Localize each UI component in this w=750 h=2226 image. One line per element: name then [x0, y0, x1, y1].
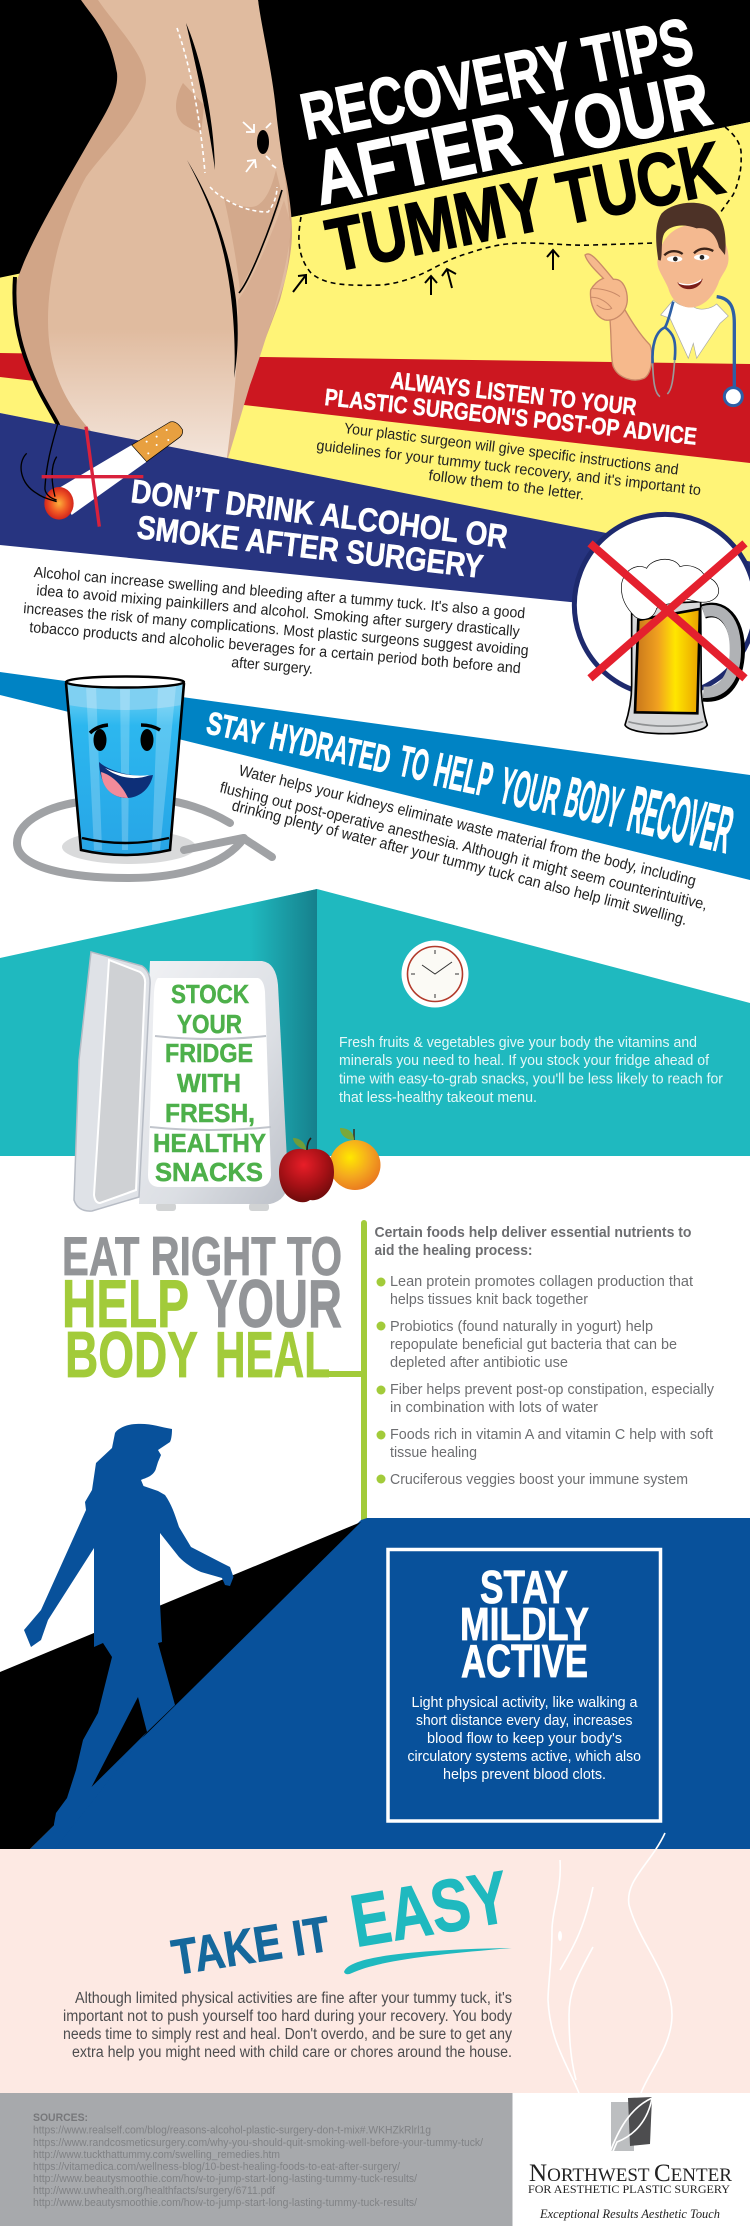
text: nutrients heading: Certain foods help deliver essential nutrients to [374, 1224, 692, 1241]
panel: take it easy background [0, 1849, 750, 2093]
heading: always listen: ALWAYS LISTEN TO YOUR [389, 367, 638, 421]
body outline strokes [14, 23, 282, 478]
text: light activity [408, 1694, 641, 1783]
logo: northwest center [512, 2093, 750, 2226]
blue band [0, 672, 750, 880]
heading: stay hydrated: YOUR [494, 757, 566, 827]
text: light activity: blood flow to keep your body's [427, 1730, 622, 1747]
navel outline [558, 1931, 562, 1941]
decorative body outline [548, 1833, 672, 2093]
heading: eat right: HEAL [215, 1318, 330, 1391]
logo: northwest center: Exceptional Results Aesthetic Touch [539, 2206, 720, 2221]
green divider [325, 1223, 364, 1520]
text: alcohol and smoking: Alcohol can increase swelling and bleeding after a tummy tuck. It's also a good [33, 564, 526, 622]
panel: stay mildly active box: STAY [480, 1561, 568, 1613]
fridge text: YOUR [177, 1011, 242, 1039]
heading: stay hydrated: HELP [430, 744, 497, 808]
panel: sources [0, 2093, 512, 2226]
text: take it easy: Although limited physical activities are fine after your tummy tuck, it's [75, 1990, 512, 2007]
panel: sources: https://vitamedica.com/wellness-blog/10-best-healing-foods-to-eat-after-surgery/ [33, 2161, 401, 2173]
text: take it easy: needs time to simply rest and heal. Don't overdo, and be sure to get any [63, 2026, 512, 2043]
text: fresh fruits: that less-healthy takeout menu. [339, 1089, 537, 1106]
text: water: flushing out post-operative anesthesia. Although it might seem counterintuitive, [218, 779, 709, 914]
doctor collar [661, 300, 728, 358]
text: water: drinking plenty of water after your tummy tuck can also help limit swelling. [230, 797, 689, 929]
panel: blue stay active background [29, 1518, 750, 1850]
text: nutrients heading: aid the healing process: [374, 1242, 532, 1259]
list: nutrient bullets: Fiber helps prevent post-op constipation, especially [390, 1381, 714, 1398]
gap between legs [92, 1697, 147, 1787]
panel: sources: http://www.tuckthattummy.com/swelling_remedies.htm [33, 2149, 280, 2161]
panel: sources: https://www.realself.com/blog/reasons-alcohol-plastic-surgery-don-t-mix#.WKHZkRlrl1g [33, 2124, 431, 2136]
text: take it easy: extra help you might need with child care or chores around the house. [72, 2044, 512, 2061]
list: nutrient bullets: depleted after antibiotic use [390, 1354, 568, 1371]
text: fresh fruits: time with easy-to-grab snacks, you'll be less likely to reach for [339, 1070, 723, 1088]
heading: always listen [323, 367, 698, 451]
text: fresh fruits: minerals you need to heal. If you stock your fridge ahead of [339, 1052, 710, 1069]
icon: cigarette crossed out [21, 422, 183, 527]
doctor eyes and smile [664, 249, 713, 289]
fridge text: FRIDGE [165, 1040, 253, 1068]
dashed incision line [177, 28, 277, 212]
icon: orange [330, 1128, 380, 1190]
list: nutrient bullets: repopulate beneficial gut bacteria that can be [390, 1336, 677, 1353]
heading: don't drink alcohol: SMOKE AFTER SURGERY [135, 508, 485, 585]
text: take it easy: important not to push yourself too hard during your recovery. You body [63, 2008, 512, 2025]
list: nutrient bullets: helps tissues knit back together [390, 1291, 588, 1308]
fridge text [153, 981, 266, 1187]
list: nutrient bullets: tissue healing [390, 1444, 477, 1461]
panel: sources: https://www.randcosmeticsurgery.com/why-you-should-quit-smoking-well-before-your-tummy-tuck/ [33, 2137, 484, 2149]
panel: sources: http://www.beautysmoothie.com/how-to-jump-start-long-lasting-tummy-tuck-results/ [33, 2173, 418, 2185]
fridge text: STOCK [171, 981, 250, 1009]
yellow background panel [0, 122, 750, 565]
icon: open fridge [74, 952, 288, 1211]
list: nutrient bullets: Probiotics (found naturally in yogurt) help [390, 1318, 653, 1335]
doctor face [657, 225, 729, 308]
list: nutrient bullets: Cruciferous veggies boost your immune system [390, 1471, 688, 1488]
icon: beer mug crossed out [574, 514, 750, 734]
heading: take it easy [168, 1855, 514, 1986]
text: light activity: short distance every day, increases [416, 1712, 632, 1729]
heading: stay hydrated: STAY [204, 705, 267, 752]
list: nutrient bullets [376, 1273, 714, 1488]
text: surgeon advice: Your plastic surgeon will give specific instructions and [343, 420, 680, 479]
doctor hair [656, 203, 726, 261]
panel: sources: SOURCES: [33, 2112, 88, 2124]
text: fresh fruits: Fresh fruits & vegetables give your body the vitamins and [339, 1034, 697, 1051]
text: alcohol and smoking: after surgery. [231, 654, 314, 678]
panel: stay mildly active box: ACTIVE [461, 1635, 588, 1687]
text: alcohol and smoking [23, 564, 529, 678]
fridge text: FRESH, [165, 1100, 255, 1128]
black header background [0, 0, 750, 278]
text: fresh fruits [339, 1034, 723, 1106]
illustration: torso [14, 0, 292, 478]
text: nutrients heading [374, 1224, 692, 1259]
heading: eat right: EAT RIGHT TO [62, 1225, 342, 1287]
heading: stay hydrated: HYDRATED [266, 715, 394, 782]
heading: take it easy: TAKE IT [168, 1906, 334, 1986]
icon: water glass with circular arrow [17, 676, 272, 878]
fridge text: WITH [177, 1070, 241, 1098]
black shadow [0, 1522, 361, 1850]
text: light activity: helps prevent blood clots. [443, 1766, 606, 1783]
text: alcohol and smoking: tobacco products and alcoholic beverages for a certain period both before and [29, 619, 521, 677]
logo: northwest center: NORTHWEST CENTER [529, 2160, 732, 2187]
fridge text: HEALTHY [153, 1130, 266, 1158]
text: water: Water helps your kidneys eliminate waste material from the body, including [237, 762, 698, 890]
navel with arrows [243, 122, 276, 172]
red band [0, 353, 750, 463]
text: surgeon advice: guidelines for your tummy tuck recovery, and it's important to [316, 437, 702, 499]
list: nutrient bullets: in combination with lots of water [390, 1399, 598, 1416]
illustration: doctor [585, 203, 742, 406]
logo: northwest center: FOR AESTHETIC PLASTIC SURGERY [528, 2182, 730, 2196]
heading: stay hydrated: TO [395, 737, 433, 791]
heading: stay hydrated [204, 705, 740, 867]
text: light activity: Light physical activity, like walking a [412, 1694, 638, 1711]
list: nutrient bullets: Lean protein promotes collagen production that [390, 1273, 694, 1290]
heading: take it easy: EASY [345, 1855, 514, 1963]
heading: eat right [62, 1225, 342, 1391]
text: surgeon advice: follow them to the letter. [427, 467, 585, 504]
panel: sources: http://www.uwhealth.org/healthfacts/surgery/6711.pdf [33, 2185, 276, 2197]
panel: teal house background [0, 889, 750, 1156]
text: light activity: circulatory systems active, which also [408, 1748, 641, 1765]
icon: apple [279, 1138, 334, 1202]
navy band [0, 413, 750, 620]
text: alcohol and smoking: idea to avoid mixing painkillers and alcohol. Smoking after surgery drastically [36, 582, 521, 640]
silhouette: walking woman [24, 1424, 234, 1850]
doctor arm and hand [585, 254, 652, 380]
heading: eat right: YOUR [206, 1266, 342, 1342]
dashed outline with arrows [293, 127, 741, 295]
fridge text: SNACKS [155, 1159, 263, 1187]
title [294, 3, 730, 288]
stethoscope [652, 297, 742, 406]
icon: wall clock [402, 940, 468, 1008]
heading: stay hydrated: BODY [559, 765, 628, 840]
heading: don't drink alcohol: DON’T DRINK ALCOHOL OR [129, 472, 510, 555]
heading: eat right: BODY [65, 1318, 198, 1391]
panel: sources: http://www.beautysmoothie.com/how-to-jump-start-long-lasting-tummy-tuck-results/ [33, 2197, 418, 2209]
panel: stay mildly active box [388, 1550, 660, 1821]
text: alcohol and smoking: increases the risk of many complications. Most plastic surgeons suggest avoiding [23, 600, 529, 659]
text: take it easy [63, 1990, 512, 2061]
panel: stay mildly active box: MILDLY [460, 1598, 589, 1650]
heading: eat right: HELP [62, 1266, 189, 1342]
list: nutrient bullets: Foods rich in vitamin A and vitamin C help with soft [390, 1426, 714, 1443]
